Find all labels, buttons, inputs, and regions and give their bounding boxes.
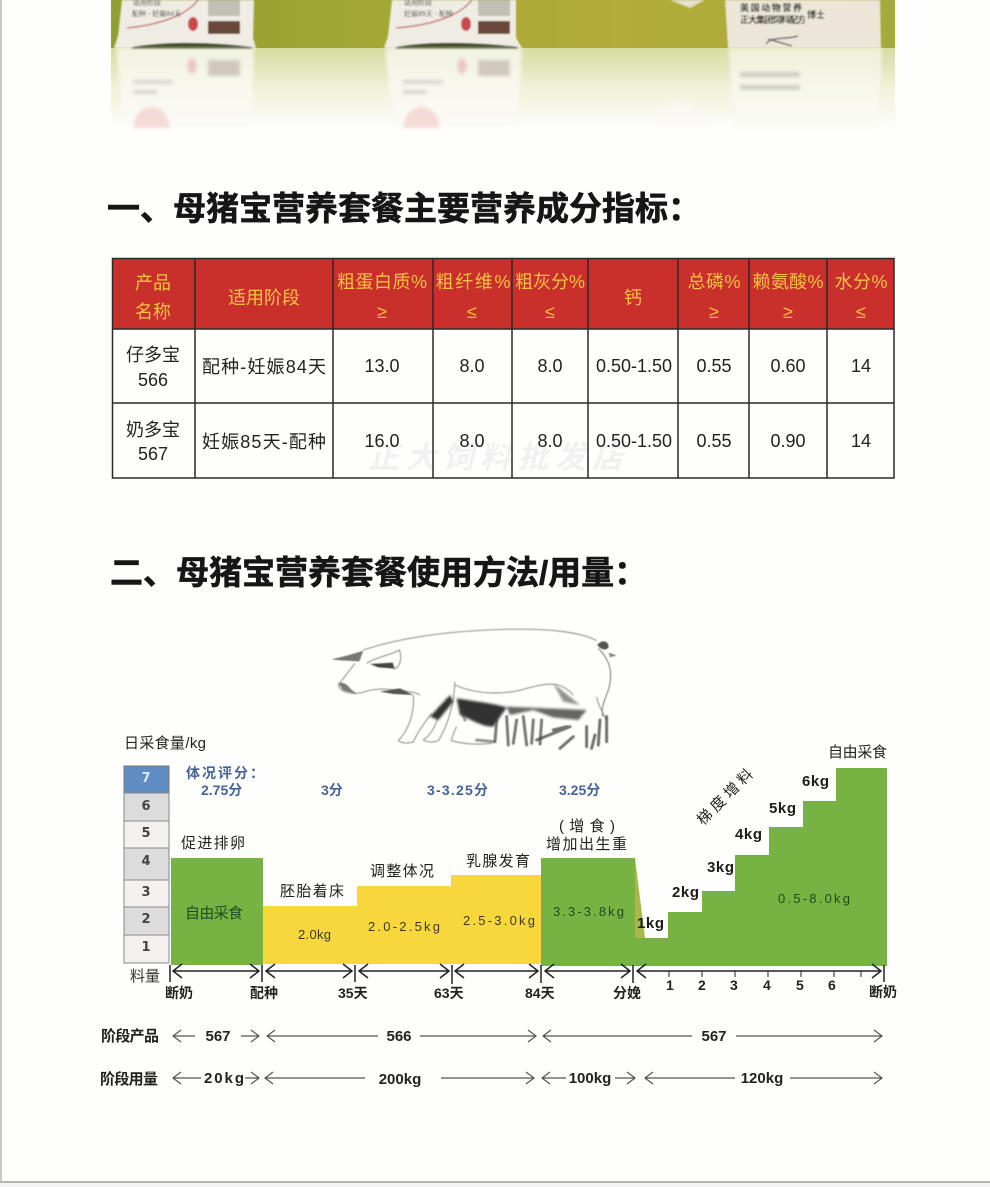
row: stage dosage: 200kg [379,1071,421,1088]
feed bag 1: 适用阶段 [133,0,161,7]
row: 566: 13.0 [364,356,400,376]
row: 567: 8.0 [537,431,563,451]
row: stage products: 566 [386,1028,412,1045]
row: stage products: 567 [701,1028,727,1045]
intake scale column: 1 [141,940,151,955]
timeline labels: 5 [796,977,804,993]
header labels: ≤ [856,302,866,322]
timeline labels [165,977,897,1001]
row: 567: 0.50-1.50 [596,431,672,451]
feed bag 3: 博士 [807,9,825,20]
stage goals: 增加出生重 [546,836,627,853]
body condition scores: 3.25分 [559,782,600,798]
row: 567: 14 [851,431,871,451]
header labels: 粗蛋白质% [337,272,427,292]
feed amounts: 自由采食 [185,905,243,922]
row: stage products [101,1027,882,1045]
stage goals: ( 增 食 ) [559,818,615,835]
staircase labels: 2kg [672,884,699,901]
stage goals: 胚胎着床 [280,883,344,900]
feed amounts: 3.3-3.8kg [553,904,624,919]
header labels: 名称 [135,302,171,322]
farrowing wedge [635,858,645,938]
header labels: 产品 [135,273,171,293]
row: 567: 0.90 [770,431,806,451]
header labels: ≥ [709,302,719,322]
timeline labels: 配种 [250,985,278,1001]
table header band [112,258,894,329]
feed bag 3 [670,0,881,48]
feed bag 3: 美国动物营养 [740,2,802,13]
feed bag 2 [384,0,522,49]
row: 567: 16.0 [364,431,400,451]
intake scale column [124,766,169,963]
body condition scores: 3-3.25分 [427,782,488,798]
illustration: sow with piglets [332,629,617,748]
row: 566: 0.50-1.50 [596,356,672,376]
feed bag 1 [114,0,256,49]
feed amounts: 0.5-8.0kg [778,891,850,906]
row: stage products: 阶段产品 [101,1027,159,1045]
timeline labels: 1 [666,977,674,993]
staircase labels: 梯度增料 [694,766,757,829]
header labels: ≤ [467,302,477,322]
row: 566: 仔多宝 [126,345,180,365]
nutrition table [112,258,894,478]
timeline labels: 3 [730,977,738,993]
staircase labels: 3kg [707,859,734,876]
feed amounts: 2.5-3.0kg [463,913,535,928]
row: 566: 566 [138,370,168,390]
row: stage dosage: 20kg [204,1070,244,1087]
body condition scores: 2.75分 [201,782,242,798]
row: stage dosage: 120kg [741,1070,783,1087]
row: 567: 0.55 [696,431,732,451]
stage goals: 调整体况 [370,863,434,880]
intake scale column: 7 [141,771,151,786]
header labels: ≤ [545,302,555,322]
heading: section two: 二、母猪宝营养套餐使用方法/用量： [110,554,647,591]
row: stage dosage [100,1070,882,1088]
axis title: 日采食量/kg [124,735,206,752]
timeline labels: 断奶 [869,984,897,1000]
timeline labels: 6 [828,977,836,993]
row: 567: 8.0 [459,431,485,451]
row: stage products: 567 [205,1028,231,1045]
row: 566: 配种-妊娠84天 [202,357,326,377]
row: 566: 8.0 [459,356,485,376]
staircase labels [637,766,829,932]
row: stage dosage: 100kg [569,1070,611,1087]
reflection floor [111,48,895,132]
header labels: 粗纤维% [436,272,510,292]
ear and eye marks [332,651,363,661]
timeline labels: 35天 [338,985,368,1001]
stage goals: 促进排卵 [181,835,245,852]
header labels: 钙 [624,288,642,308]
stage goals: 乳腺发育 [466,853,530,870]
step area: green late gestation [541,858,635,966]
header labels: 粗灰分% [515,272,585,292]
watermark: 正大饲料批发店 [368,440,628,475]
feed amounts: 2.0kg [298,927,331,942]
feed amounts [185,891,850,942]
table grid [112,258,894,478]
row: 566: 14 [851,356,871,376]
header labels: ≥ [783,302,793,322]
header labels: ≥ [377,302,387,322]
row: 566: 0.60 [770,356,806,376]
row: 567: 妊娠85天-配种 [202,432,326,452]
intake scale column: 2 [141,912,151,927]
timeline arrows [170,964,884,984]
timeline labels: 分娩 [613,985,641,1001]
row: 566: 0.55 [696,356,732,376]
row: stage dosage: 阶段用量 [100,1070,158,1088]
header labels: 适用阶段 [228,288,300,308]
body condition scores: 体况评分： [186,765,264,781]
chart: daily feed intake by stage [124,735,897,1001]
intake scale column: 5 [141,826,151,841]
row: 566 [126,345,871,390]
row: 567 [126,420,871,464]
timeline labels: 4 [763,977,771,993]
intake scale column: 3 [141,885,151,900]
piglets shading [430,683,587,727]
row: 566: 8.0 [537,356,563,376]
row: 567: 567 [138,444,168,464]
step area: yellow gestation [263,875,541,964]
step area: green free feeding [171,858,263,965]
header labels: 赖氨酸% [752,272,824,292]
header labels [135,272,888,322]
header labels: 总磷% [688,272,740,292]
feed bag 3: 正大集团饲料配方 [740,14,806,25]
staircase labels: 1kg [637,915,664,932]
product photo banner with reflection [111,0,895,132]
photo background [111,0,895,48]
header labels: 水分% [834,272,888,292]
staircase labels: 4kg [735,826,762,843]
feed amount axis label: 料量 [130,968,160,985]
intake scale column: 6 [141,799,151,814]
timeline labels: 63天 [434,985,464,1001]
staircase labels: 6kg [802,773,829,790]
staircase labels: 5kg [769,800,796,817]
body condition scores [186,765,600,798]
intake scale column: 4 [141,854,151,869]
feed bag 2: 适用阶段 [404,0,432,7]
stage goals: 自由采食 [828,744,887,761]
step area: lactation staircase [635,768,887,966]
timeline labels: 84天 [525,985,555,1001]
timeline labels: 2 [698,977,706,993]
bag reflections [116,48,882,130]
feed bag 1: 配种 - 妊娠84天 [132,9,181,18]
feed bag 2: 妊娠85天 - 配种 [404,9,453,18]
stage goals [181,744,887,900]
feed amounts: 2.0-2.5kg [368,919,440,934]
body condition scores: 3分 [321,782,343,798]
heading: section one: 一、母猪宝营养套餐主要营养成分指标： [107,190,701,227]
row: 567: 奶多宝 [126,420,180,440]
timeline labels: 断奶 [165,985,193,1001]
